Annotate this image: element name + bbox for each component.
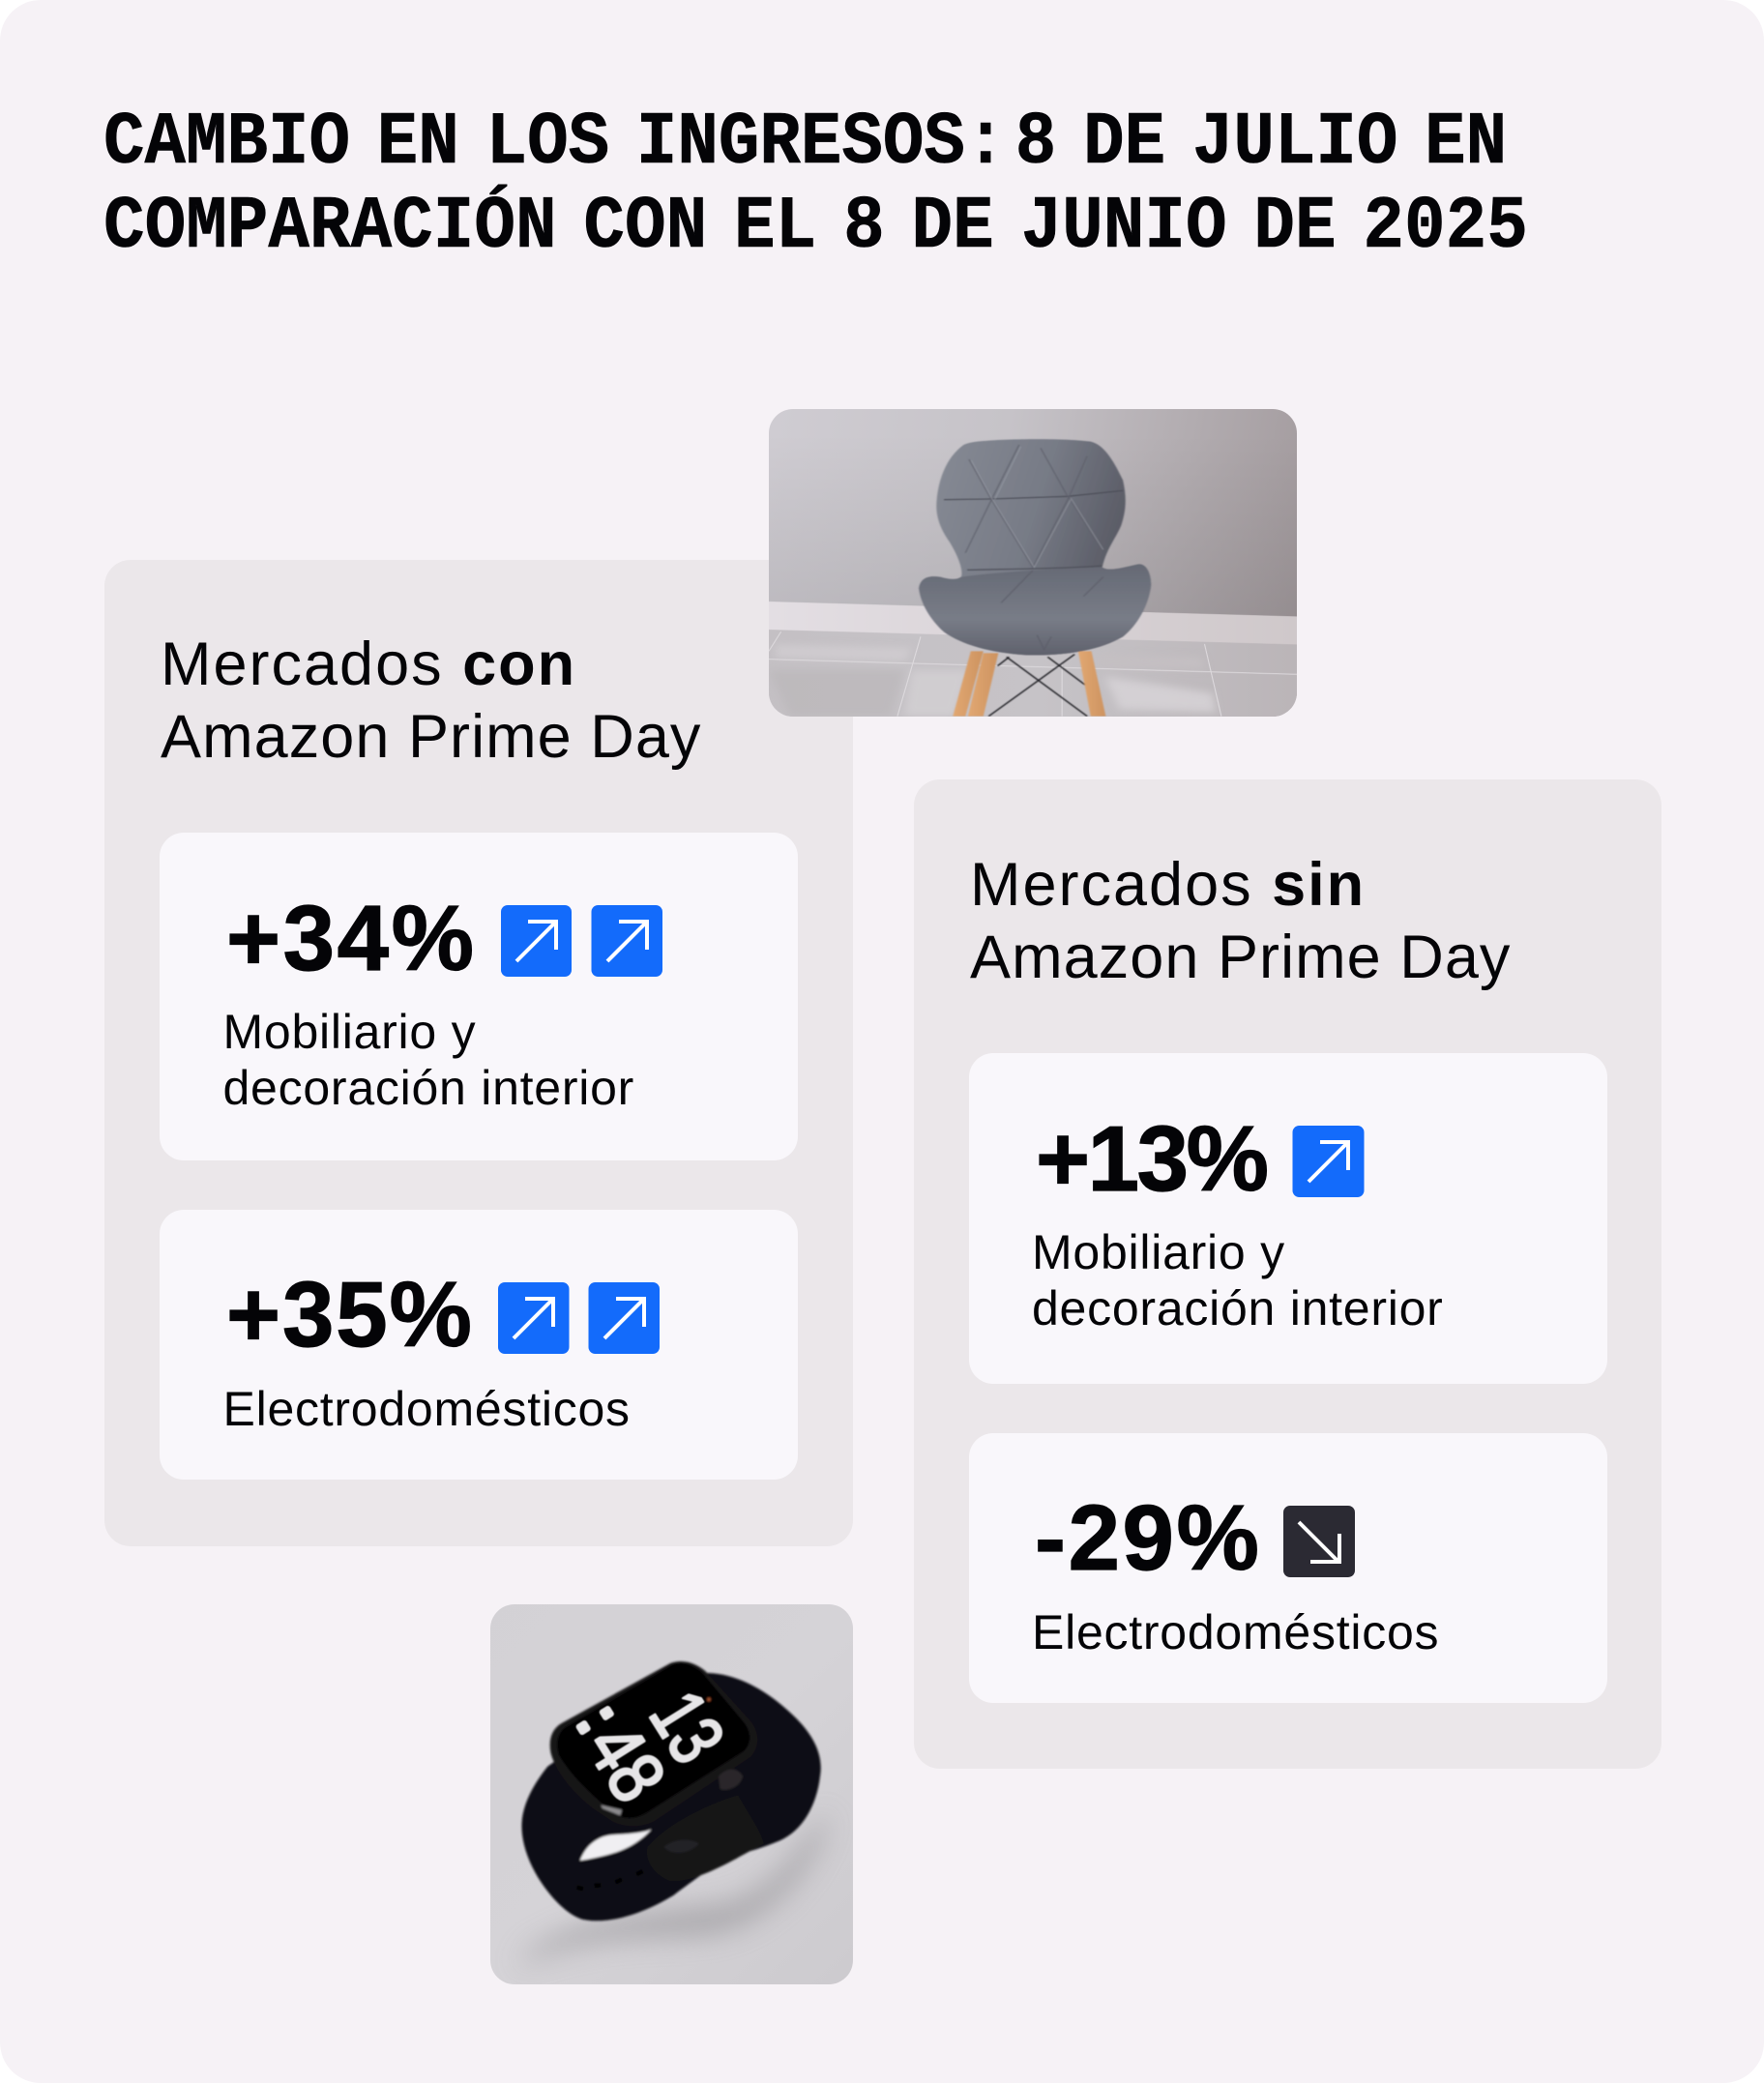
case [550, 1661, 757, 1826]
card: furniture +34% [160, 833, 798, 1160]
label: furniture [1032, 1225, 1444, 1335]
label: furniture: decoración interior [1032, 1281, 1444, 1335]
watch face time: 13 [633, 1677, 741, 1777]
label: appliances: Electrodomésticos [222, 1382, 631, 1436]
icon: up arrow [592, 905, 662, 977]
title: COMPARACIÓN CON EL 8 DE JUNIO DE 2025 [103, 185, 1528, 270]
title: CAMBIO EN LOS INGRESOS: 8 DE JULIO EN [103, 102, 1507, 186]
watch face time: 48 [571, 1709, 683, 1816]
legs [988, 655, 1087, 717]
panel: markets without Amazon Prime Day [914, 779, 1661, 1769]
value -29%: -29% [1035, 1486, 1262, 1590]
soft shadow [526, 1822, 830, 1965]
heading: with Prime Day: Mercados con [161, 631, 576, 698]
icon: up arrow [1292, 1126, 1364, 1197]
photo: smartwatch [490, 1604, 853, 1984]
card: appliances -29% [969, 1433, 1607, 1703]
panel: markets with Amazon Prime Day [104, 560, 853, 1546]
heading: without Prime Day: Amazon Prime Day [970, 924, 1511, 991]
icon: up arrow [501, 905, 572, 977]
photo: chair [769, 409, 1297, 717]
card: furniture +13% [969, 1053, 1607, 1384]
heading: with Prime Day [161, 631, 701, 771]
label: furniture: Mobiliario y [1032, 1225, 1285, 1279]
label: furniture: Mobiliario y [222, 1005, 476, 1059]
watch face time: : [564, 1691, 633, 1745]
value +13%: +13% [1036, 1107, 1267, 1211]
label: furniture: decoración interior [222, 1061, 634, 1115]
icon: down arrow [1283, 1506, 1355, 1577]
floor marble [769, 645, 1216, 717]
label: furniture [222, 1005, 634, 1115]
title [103, 102, 1528, 270]
watch face time [574, 1692, 723, 1803]
heading: without Prime Day [970, 851, 1511, 991]
strap [521, 1673, 821, 1921]
card: appliances +35% [160, 1210, 798, 1480]
value +35%: +35% [226, 1263, 474, 1366]
chair shell [936, 439, 1126, 656]
value +34%: +34% [226, 887, 477, 990]
icon: up arrow [498, 1282, 569, 1354]
crown [719, 1770, 743, 1790]
icon: up arrow [588, 1282, 660, 1354]
heading: without Prime Day: Mercados sin [970, 851, 1366, 919]
seams [944, 490, 1123, 570]
heading: with Prime Day: Amazon Prime Day [161, 703, 701, 771]
label: appliances: Electrodomésticos [1032, 1605, 1439, 1659]
